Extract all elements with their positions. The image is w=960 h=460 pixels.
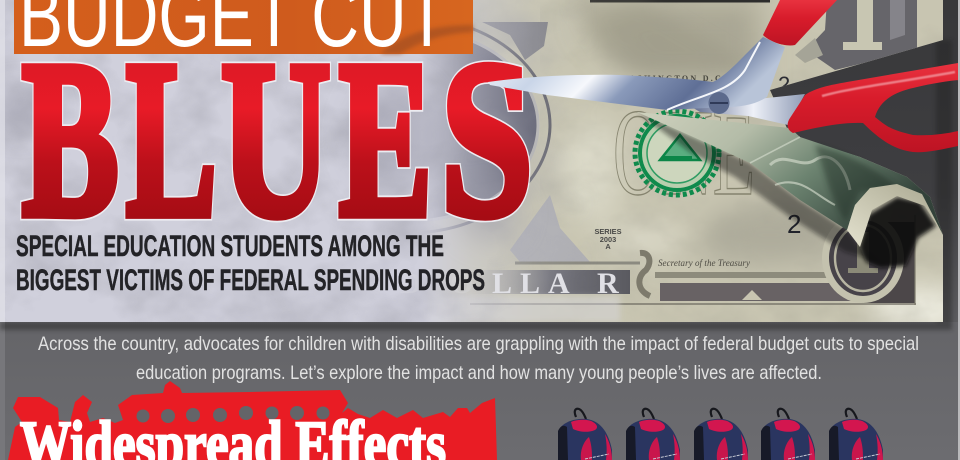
paper fade overlay	[0, 0, 545, 322]
letter fills: S	[441, 16, 533, 263]
bill mottling	[552, 84, 924, 322]
dark backdrop behind the cut bill	[640, 0, 960, 322]
washington label: WASHINGTON D.C.	[620, 74, 725, 83]
banner punch holes	[136, 406, 330, 423]
grey blotches	[0, 80, 520, 241]
curl hole	[860, 197, 936, 268]
curl dark engraving	[815, 145, 900, 222]
curl lip	[847, 184, 943, 247]
lower blade	[690, 94, 805, 125]
treasury signature: Secretary of the Treasury	[658, 258, 750, 268]
letter outlines: L	[126, 15, 217, 262]
letter outlines: E	[339, 16, 432, 263]
right edge strip	[958, 0, 960, 460]
numeral 2 lower: 2	[787, 209, 801, 239]
bottom fade	[430, 296, 620, 322]
letter fills	[22, 15, 533, 263]
backpack row	[558, 409, 883, 460]
icon: backpack 3	[694, 409, 748, 460]
bottom border ornament	[470, 213, 916, 305]
left paper edge	[0, 0, 5, 322]
letter outlines: S	[441, 16, 533, 263]
treasury seal	[635, 111, 719, 195]
top serial band	[590, 0, 770, 2]
section banner: torn red	[8, 381, 497, 460]
letter outlines: U	[221, 16, 331, 263]
letter fills: U	[221, 16, 331, 263]
icon: backpack 2	[626, 409, 680, 460]
dollar word: DO LLAR	[400, 267, 619, 300]
fold crease shade	[580, 0, 650, 55]
upper handle	[763, 0, 837, 45]
box stain	[380, 25, 473, 54]
top right corner numeral	[795, 0, 917, 70]
orange title box	[14, 0, 473, 54]
curled bill corner	[637, 112, 943, 268]
series label	[594, 229, 622, 249]
title: blues	[22, 15, 533, 263]
portrait oval	[429, 22, 590, 262]
upper blade	[488, 37, 785, 110]
lower handle	[788, 63, 958, 152]
series label: 2003	[600, 235, 616, 244]
icon: backpack 4	[761, 409, 815, 460]
panel: dollar bill hero	[0, 0, 960, 332]
subtitle	[16, 230, 485, 297]
bill paper	[430, 0, 943, 322]
left edge strip	[0, 322, 5, 460]
curl engraving	[750, 137, 850, 205]
scissors	[488, 0, 958, 152]
curl underside	[637, 112, 943, 235]
subtitle: SPECIAL EDUCATION STUDENTS AMONG THE	[16, 230, 444, 263]
icon: backpack 5	[829, 409, 883, 460]
paper clouds	[5, 0, 540, 322]
handle highlight	[822, 72, 955, 96]
bill drop shadow	[0, 40, 952, 330]
letter fills: E	[339, 16, 432, 263]
series label: SERIES	[594, 227, 622, 236]
intro text: education programs. Let’s explore the impact and how many young people’s lives are affected.	[136, 362, 822, 384]
pivot screw	[708, 92, 730, 114]
intro text	[38, 333, 919, 384]
subtitle: BIGGEST VICTIMS OF FEDERAL SPENDING DROPS	[16, 264, 485, 297]
curl shadow	[637, 112, 880, 262]
series label: A	[605, 242, 611, 251]
numeral 2 upper: 2	[778, 72, 790, 97]
letter fills: L	[126, 15, 217, 262]
torn red shape	[8, 381, 497, 460]
blade edge highlight	[667, 42, 760, 110]
letter outlines: B	[22, 15, 119, 263]
icon: backpack 1	[558, 409, 612, 460]
one watermark: ONE	[613, 84, 755, 221]
letter fills: B	[22, 15, 119, 263]
bill stains	[560, 0, 960, 332]
letter outlines	[22, 15, 533, 263]
